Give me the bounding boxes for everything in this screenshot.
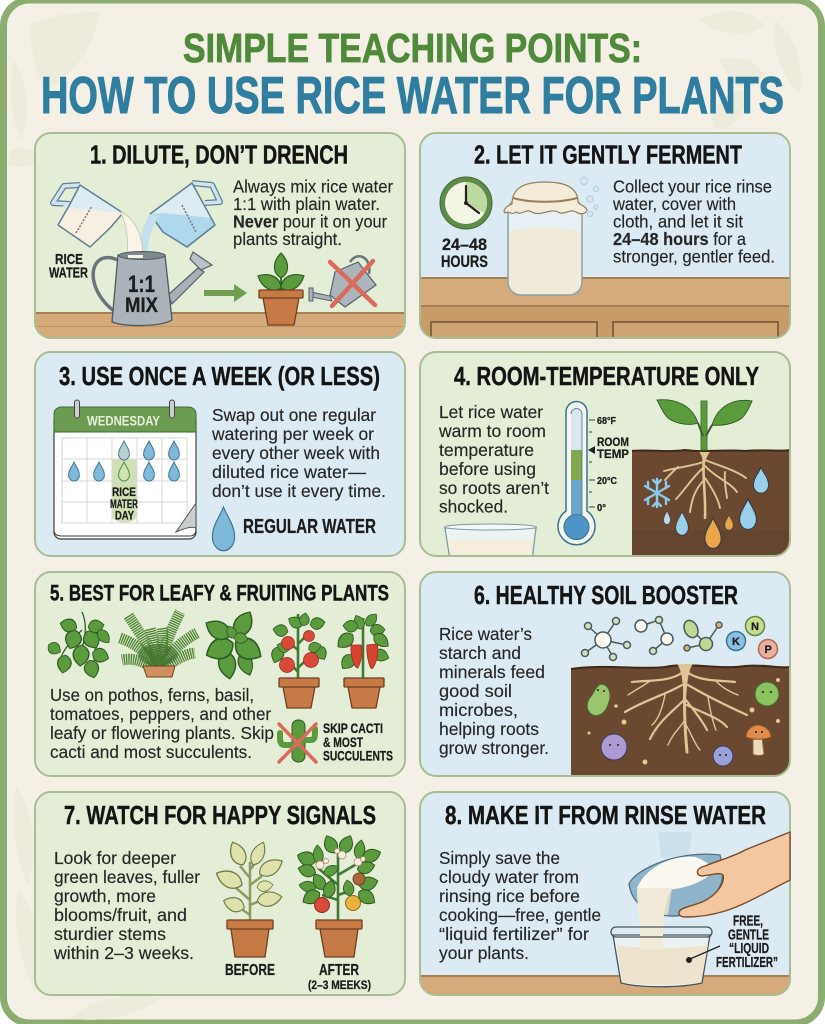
body text: microbes,: [439, 700, 518, 720]
body text: good soil: [439, 681, 512, 701]
body text: sturdier stems: [54, 924, 166, 944]
microbes: [587, 678, 780, 766]
callout: liquid fertilizer: FERTILIZER”: [716, 955, 778, 971]
body text: every other week with: [212, 443, 380, 463]
panel 1: dilute, don't drench: [35, 133, 405, 338]
icon: calendar: MATER: [110, 497, 138, 511]
body text: plants straight.: [233, 229, 342, 249]
icon: glass of rice water: [444, 524, 537, 555]
body text: [438, 402, 549, 516]
rice water day highlight: [112, 459, 137, 522]
icon: fermentation bubbles: [580, 178, 598, 216]
water drops: [69, 441, 179, 481]
icon: rice water cup: [53, 185, 123, 247]
body text: warm to room: [438, 421, 546, 441]
body text: [439, 848, 601, 963]
label: rice water: WATER: [49, 264, 88, 282]
heading: 7. WATCH FOR HAPPY SIGNALS: [64, 800, 376, 830]
body text: don’t use it every time.: [212, 481, 386, 501]
callout: liquid fertilizer: FREE,: [733, 914, 763, 930]
body text: [612, 176, 775, 266]
body text: Collect your rice rinse: [613, 176, 772, 196]
icon: potted seedling: [255, 253, 307, 325]
callout: liquid fertilizer: “LIQUID: [729, 941, 769, 957]
body text: temperature: [439, 440, 534, 460]
heading: 2. LET IT GENTLY FERMENT: [474, 140, 742, 170]
arrow: [204, 284, 247, 302]
label: before: BEFORE: [225, 962, 275, 979]
icon: nutrient badges: K: [732, 636, 740, 648]
icon: calendar: DAY: [115, 508, 134, 522]
icon: nutrient badges: N: [751, 621, 759, 633]
temperature labels: 20°C: [597, 475, 617, 487]
body text: “liquid fertilizer” for: [439, 924, 589, 944]
body text: Never pour it on your: [233, 212, 387, 232]
panel 2: let it gently ferment: [420, 133, 790, 342]
body text: 24–48 hours for a: [613, 229, 746, 249]
body text: [50, 685, 274, 762]
icon: pepper plant: [334, 611, 392, 708]
legend: regular water: [212, 507, 376, 551]
label: skip cacti: & MOST: [323, 735, 364, 750]
label: skip cacti: SUCCULENTS: [323, 748, 393, 764]
body text: 1:1 with plain water.: [233, 194, 380, 214]
label: skip cacti: [323, 721, 393, 764]
icon: crossed out cactus: [279, 720, 316, 762]
panel 7: watch for happy signals: [35, 792, 405, 995]
icon: before plant: [213, 839, 286, 957]
heading: 5. BEST FOR LEAFY & FRUITING PLANTS: [50, 580, 389, 606]
body text: Swap out one regular: [212, 405, 376, 425]
body text: shocked.: [439, 496, 508, 516]
legend: regular water: REGULAR WATER: [243, 516, 376, 538]
body text: cacti and most succulents.: [50, 742, 252, 762]
icon: snowflake: [645, 479, 669, 507]
rice water pour streams: [120, 212, 160, 258]
heading: 1. DILUTE, DON’T DRENCH: [90, 140, 348, 170]
body text: Always mix rice water: [233, 176, 393, 196]
temperature labels: 0°: [597, 502, 606, 514]
icon: fern: [120, 612, 197, 677]
icon: basil: [202, 608, 266, 680]
icon: calendar: RICE: [112, 485, 136, 499]
icon: after plant: [295, 833, 383, 957]
body text: growth, more: [54, 886, 156, 906]
body text: before using: [439, 459, 536, 479]
icon: thermometer: [558, 402, 595, 545]
panel 8: make it from rinse water: [420, 792, 790, 995]
icon: jar with cloth: [504, 182, 587, 295]
body text: helping roots: [439, 719, 539, 739]
icon: nutrient badges: [726, 616, 778, 658]
icon: plant with roots: [657, 400, 752, 518]
body text: Rice water’s: [439, 624, 532, 644]
body text: Use on pothos, ferns, basil,: [50, 685, 254, 705]
label: 24-48 hours: 24–48: [442, 235, 487, 254]
body text: green leaves, fuller: [54, 867, 200, 887]
body text: watering per week or: [211, 424, 374, 444]
body text: within 2–3 weeks.: [53, 943, 194, 963]
panel 6: healthy soil booster: [420, 572, 790, 776]
wood shelf: [35, 312, 405, 338]
panel 5: best for leafy & fruiting plants: [35, 572, 405, 776]
body text: minerals feed: [439, 662, 545, 682]
body text: grow stronger.: [439, 738, 549, 758]
icon: watering can 1:1 mix: 1:1: [128, 271, 155, 298]
icon: clock: [440, 177, 492, 229]
icon: tomato plant: [269, 612, 330, 708]
body text: rinsing rice before: [439, 886, 580, 906]
body text: cloth, and let it sit: [613, 212, 743, 232]
icon: watering can 1:1 mix: MIX: [125, 294, 158, 317]
body text: blooms/fruit, and: [54, 905, 187, 925]
label: 24-48 hours: HOURS: [441, 252, 488, 271]
title: [41, 25, 784, 125]
body text: Let rice water: [439, 402, 543, 422]
icon: crossed out watering can: [309, 256, 376, 307]
label: after: [308, 962, 371, 992]
icon: water stream: [658, 832, 692, 858]
body text: Look for deeper: [54, 848, 176, 868]
body text: cloudy water from: [439, 867, 579, 887]
temperature labels: [588, 415, 629, 514]
body text: water, cover with: [612, 194, 736, 214]
icon: rice falling: [637, 888, 672, 945]
heading: 3. USE ONCE A WEEK (OR LESS): [59, 361, 380, 391]
wood counter and cabinets: [420, 277, 790, 342]
soil: [571, 665, 790, 776]
body text: [53, 848, 200, 963]
temperature labels: 68°F: [597, 415, 616, 427]
icon: calendar: [54, 400, 196, 539]
temperature labels: ROOM: [597, 435, 629, 449]
body text: [439, 624, 549, 758]
title line 1: SIMPLE TEACHING POINTS:: [183, 25, 642, 71]
body text: Simply save the: [439, 848, 560, 868]
soil: [444, 450, 790, 560]
body text: cooking—free, gentle: [439, 905, 601, 925]
icon: watering can 1:1 mix: [93, 252, 212, 326]
icon: plain water cup: [150, 183, 220, 247]
icon: clear container with milky water: [611, 920, 712, 987]
body text: leafy or flowering plants. Skip: [50, 723, 274, 743]
label: rice water: RICE: [55, 251, 83, 268]
soil water drops: [664, 468, 768, 548]
panel 4: room-temperature only: [420, 352, 790, 560]
body text: stronger, gentler feed.: [613, 246, 775, 266]
label: after: AFTER: [319, 962, 359, 979]
icon: pothos: [45, 612, 113, 680]
icon: starch molecules: [582, 616, 722, 660]
body text: diluted rice water—: [212, 462, 367, 482]
panel 3: use once a week: [35, 352, 405, 556]
wood counter: [420, 975, 790, 995]
body text: your plants.: [439, 943, 529, 963]
roots: [625, 664, 747, 752]
icon: calendar: WEDNESDAY: [87, 414, 160, 428]
label: after: (2–3 MEEKS): [308, 980, 371, 992]
icon: hand: [679, 832, 790, 917]
temperature labels: TEMP: [597, 447, 629, 461]
page curl: [176, 503, 196, 532]
body text: so roots aren’t: [439, 478, 549, 498]
body text: [233, 176, 393, 249]
body text: tomatoes, peppers, and other: [50, 704, 271, 724]
label: skip cacti: SKIP CACTI: [323, 721, 383, 736]
icon: nutrient badges: P: [764, 644, 772, 656]
callout: liquid fertilizer: GENTLE: [728, 928, 769, 944]
icon: bowl of rice: [629, 854, 723, 916]
label: rice water: [49, 251, 88, 282]
body text: starch and: [439, 643, 521, 663]
body text: [211, 405, 386, 501]
heading: 6. HEALTHY SOIL BOOSTER: [474, 580, 738, 610]
label: 24-48 hours: [441, 235, 488, 271]
callout: liquid fertilizer: [686, 914, 778, 971]
